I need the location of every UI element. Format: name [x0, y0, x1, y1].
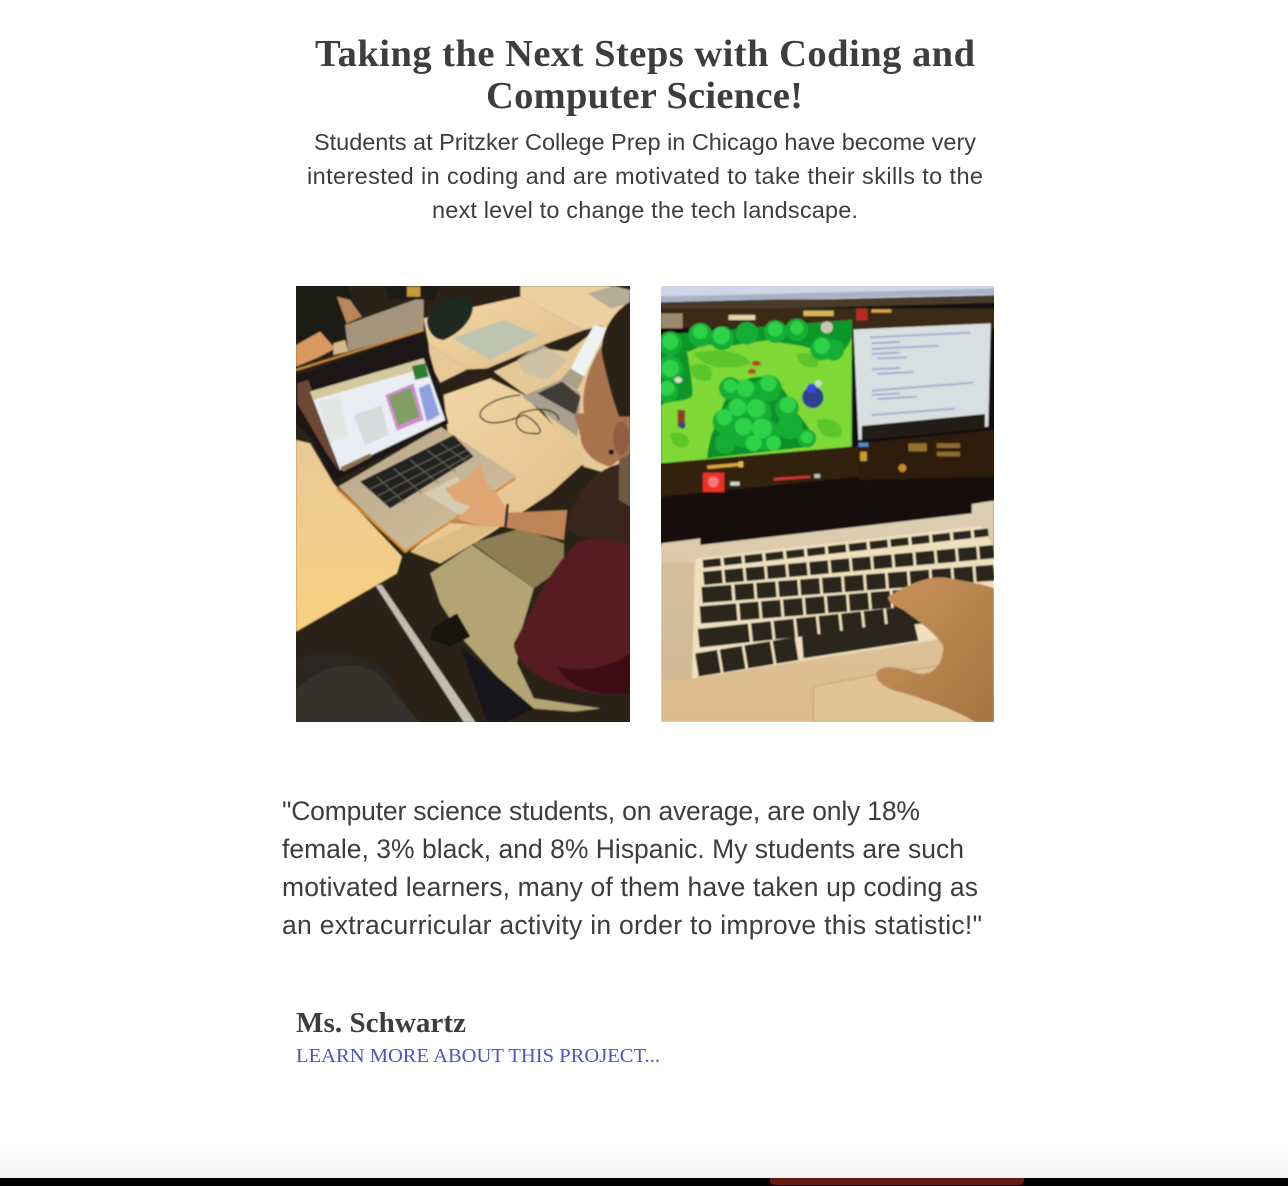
teacher name: Ms. Schwartz: [296, 1007, 466, 1039]
intro text: Students at Pritzker College Prep in Chicago have become very: [314, 129, 976, 155]
intro text: [307, 129, 983, 223]
teacher quote: motivated learners, many of them have taken up coding as: [282, 872, 978, 902]
footer bar: [0, 1140, 1288, 1186]
project link: LEARN MORE ABOUT THIS PROJECT...: [296, 1045, 660, 1067]
teacher quote: "Computer science students, on average, are only 18%: [282, 796, 920, 826]
teacher quote: [282, 796, 982, 940]
title: Taking the Next Steps with Coding and: [315, 33, 975, 75]
teacher quote: an extracurricular activity in order to improve this statistic!": [282, 910, 982, 940]
teacher quote: female, 3% black, and 8% Hispanic. My students are such: [282, 834, 964, 864]
photo: student working at a laptop in class: [296, 286, 630, 722]
title: [315, 33, 975, 117]
title: Computer Science!: [486, 75, 803, 117]
tree masses under the canopy: [661, 320, 852, 405]
intro text: next level to change the tech landscape.: [432, 197, 858, 223]
photo: code game on a laptop screen: [661, 286, 994, 722]
intro text: interested in coding and are motivated to take their skills to the: [307, 163, 983, 189]
